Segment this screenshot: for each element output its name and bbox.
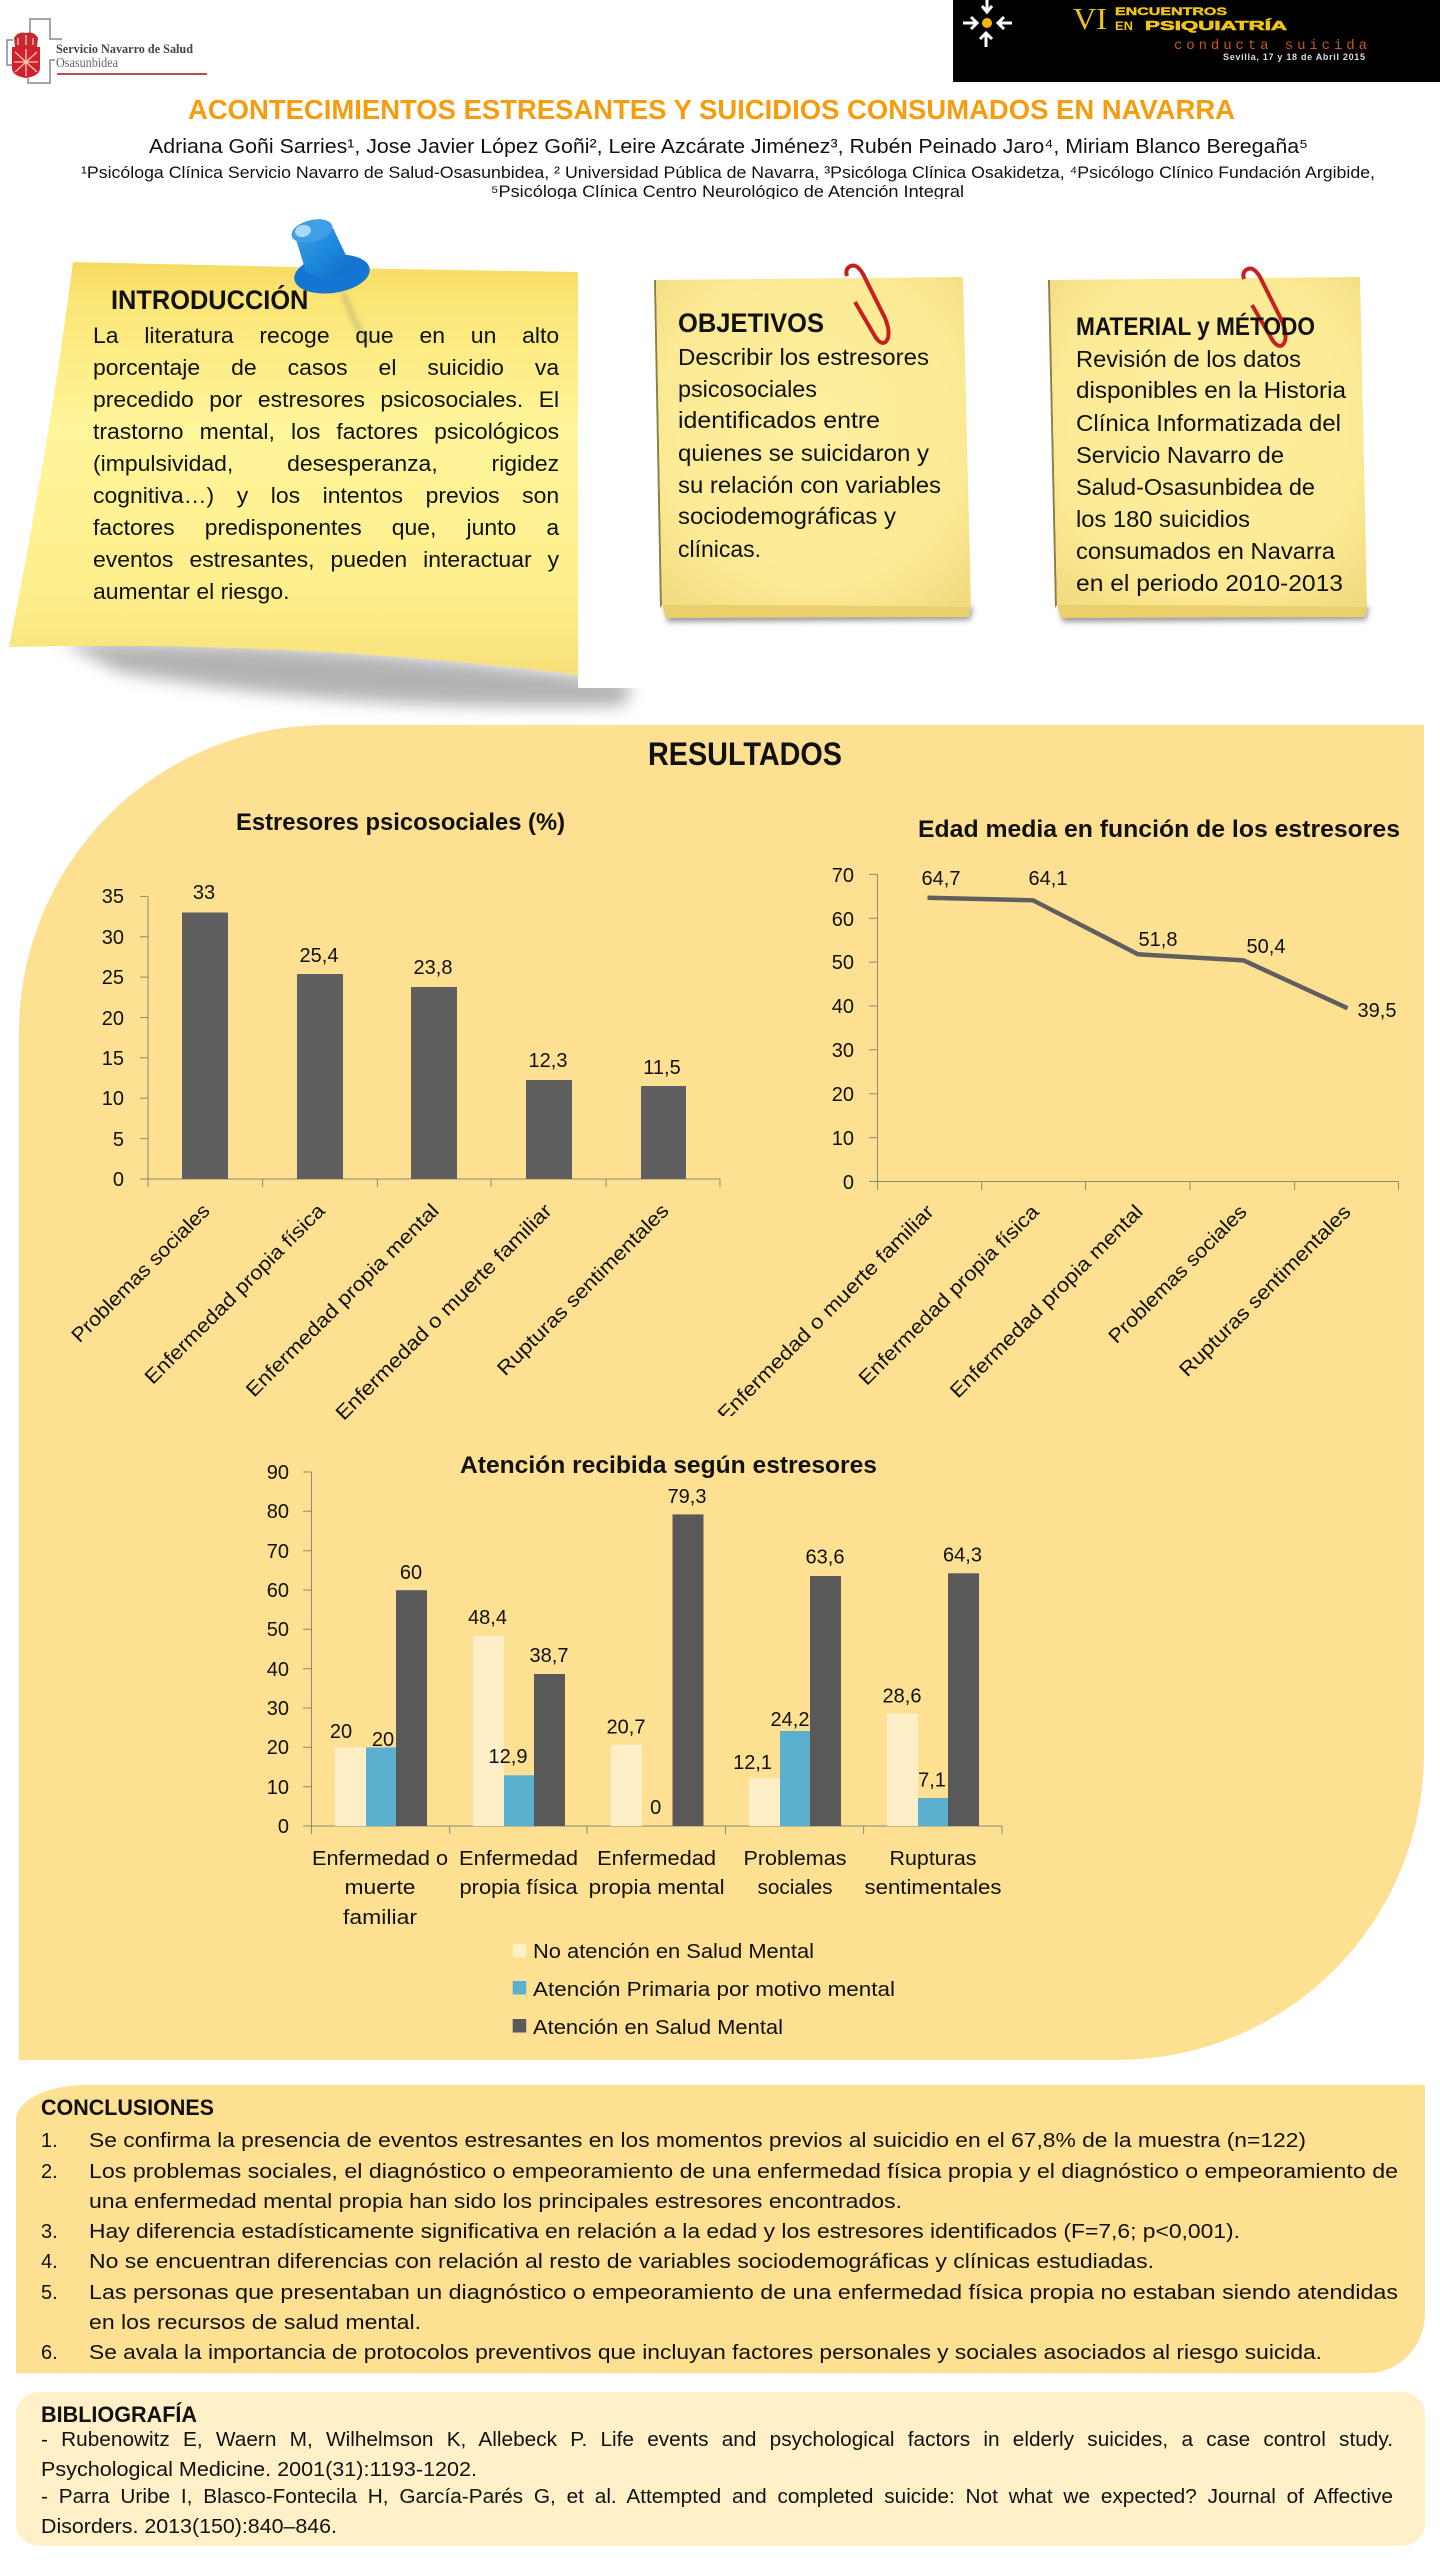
grouped bar chart: atención recibida: Atención recibida según estresores	[460, 1452, 877, 1479]
grouped bar chart: atención recibida: 38,7	[530, 1645, 568, 1667]
panel: conclusiones: Hay diferencia estadísticamente significativa en relación a la edad y los estresores identificados (F=7,6; p<0,001).	[89, 2221, 1240, 2243]
grouped bar chart: atención recibida: 20	[372, 1729, 394, 1751]
material y método heading and text: Clínica Informatizada del	[1076, 410, 1341, 436]
panel: conclusiones: 5.	[41, 2282, 58, 2304]
line chart: edad media: 20	[832, 1084, 854, 1106]
panel: objetivos sticky note	[654, 266, 973, 622]
bar chart: estresores psicosociales: 11,5	[643, 1057, 681, 1079]
objetivos heading and text: quienes se suicidaron y	[678, 440, 930, 466]
heading: resultados: RESULTADOS	[648, 736, 842, 772]
header banner: VI Encuentros en Psiquiatría: conducta suicida	[1174, 38, 1367, 54]
grouped bar chart: atención recibida: 0	[278, 1816, 289, 1838]
affiliations	[82, 166, 1374, 199]
header banner: VI Encuentros en Psiquiatría: Sevilla, 17 y 18 de Abril 2015	[1223, 52, 1365, 62]
line chart: edad media: 0	[843, 1172, 854, 1194]
line chart: edad media: Problemas sociales	[1104, 1201, 1252, 1348]
line chart: edad media: 40	[832, 996, 854, 1018]
objetivos heading and text: sociodemográficas y	[678, 503, 897, 529]
bar chart: estresores psicosociales: 25	[102, 967, 124, 989]
bar chart: estresores psicosociales: 15	[102, 1048, 124, 1070]
bar chart: estresores psicosociales: 12,3	[529, 1050, 567, 1072]
line chart: edad media: 64,1	[1029, 868, 1067, 890]
panel: material y método sticky note	[1048, 269, 1369, 622]
grouped bar chart: atención recibida: Rupturas	[890, 1848, 976, 1870]
bar chart: estresores psicosociales: Enfermedad propia mental	[242, 1200, 444, 1402]
pin shadow	[343, 293, 367, 343]
line chart: edad media: Enfermedad propia física	[855, 1200, 1044, 1390]
panel: introducción sticky note	[9, 215, 708, 707]
bar chart: estresores psicosociales: 20	[102, 1008, 124, 1030]
grouped bar chart: atención recibida: 20	[267, 1737, 289, 1759]
panel: bibliografía: Disorders. 2013(150):840–846.	[41, 2516, 337, 2538]
legend	[513, 1941, 895, 2039]
line chart: edad media: Rupturas sentimentales	[1175, 1201, 1356, 1381]
line chart: edad media: Edad media en función de los estresores	[918, 816, 1400, 843]
grouped bar chart: atención recibida: 40	[267, 1659, 289, 1681]
introducción paragraph: cognitiva…) y los intentos previos son	[93, 482, 559, 508]
line chart: edad media: 10	[832, 1128, 854, 1150]
objetivos heading and text: clínicas.	[678, 536, 761, 562]
bibliografía justified references: - Rubenowitz E, Waern M, Wilhelmson K, Allebeck P. Life events and psychological factors in elderly suicides, a case control study.	[41, 2429, 1393, 2451]
grouped bar chart: atención recibida: 10	[267, 1777, 289, 1799]
introducción paragraph: precedido por estresores psicosociales. El	[93, 386, 559, 412]
introducción paragraph: (impulsividad, desesperanza, rigidez	[93, 450, 559, 476]
bar chart: estresores psicosociales: 5	[113, 1129, 124, 1151]
grouped bar chart: atención recibida: Enfermedad	[459, 1848, 578, 1870]
grouped bar chart: atención recibida: 30	[267, 1698, 289, 1720]
grouped bar chart: atención recibida: 7,1	[918, 1770, 946, 1792]
objetivos heading and text	[678, 308, 941, 562]
panel: bibliografía: BIBLIOGRAFÍA	[41, 2402, 197, 2427]
header banner: VI Encuentros en Psiquiatría: VI	[1073, 1, 1107, 36]
panel: bibliografía	[16, 2392, 1425, 2546]
panel: conclusiones: Se confirma la presencia de eventos estresantes en los momentos previos al suicidio en el 67,8% de la muestra (n=122)	[89, 2130, 1306, 2152]
icon: red paperclip	[1243, 269, 1286, 346]
header banner: VI Encuentros en Psiquiatría: PSIQUIATRÍA	[1145, 18, 1288, 33]
panel: conclusiones: Se avala la importancia de protocolos preventivos que incluyan factores personales y sociales asociados al riesgo suicida.	[89, 2342, 1322, 2364]
material y método heading and text: MATERIAL y MÉTODO	[1076, 312, 1315, 341]
grouped bar chart: atención recibida: familiar	[343, 1907, 417, 1929]
line chart: edad media: 50	[832, 952, 854, 974]
bar chart: estresores psicosociales: Problemas sociales	[67, 1200, 215, 1347]
grouped bar chart: atención recibida: 80	[267, 1501, 289, 1523]
objetivos heading and text: psicosociales	[678, 376, 817, 402]
material y método heading and text: consumados en Navarra	[1076, 538, 1335, 564]
introducción paragraph: La literatura recoge que en un alto	[93, 322, 559, 348]
grouped bar chart: atención recibida: muerte	[344, 1877, 416, 1899]
panel: conclusiones: 2.	[41, 2161, 58, 2183]
affiliations: ⁵Psicóloga Clínica Centro Neurológico de Atención Integral	[491, 182, 964, 201]
objetivos heading and text: su relación con variables	[678, 472, 941, 498]
line chart: edad media: 50,4	[1247, 936, 1285, 958]
grouped bar chart: atención recibida: 12,9	[489, 1746, 527, 1768]
grouped bar chart: atención recibida: sociales	[758, 1877, 832, 1899]
introducción paragraph: trastorno mental, los factores psicológicos	[93, 418, 559, 444]
grouped bar chart: atención recibida: Problemas	[744, 1848, 846, 1870]
grouped bar chart: atención recibida: 20	[330, 1721, 352, 1743]
affiliations: ¹Psicóloga Clínica Servicio Navarro de Salud-Osasunbidea, ² Universidad Pública de Navarra, ³Psicóloga Clínica Osakidetza, ⁴Psicólogo Clínico Fundación Argibide,	[81, 163, 1375, 182]
grouped bar chart: atención recibida	[267, 1452, 1002, 2039]
panel: conclusiones: No se encuentran diferencias con relación al resto de variables sociodemográficas y clínicas estudiadas.	[89, 2251, 1154, 2273]
panel: conclusiones: 3.	[41, 2221, 58, 2243]
material y método heading and text: Servicio Navarro de	[1076, 442, 1284, 468]
introducción paragraph: porcentaje de casos el suicidio va	[93, 354, 559, 380]
material y método heading and text	[1076, 312, 1346, 596]
panel: conclusiones	[16, 2085, 1425, 2373]
icon: red paperclip	[846, 266, 889, 343]
panel: resultados	[19, 725, 1424, 2060]
line chart: edad media: 30	[832, 1040, 854, 1062]
panel: conclusiones: una enfermedad mental propia han sido los principales estresores encontrados.	[89, 2191, 902, 2213]
introducción paragraph	[93, 322, 560, 604]
line chart: edad media	[714, 816, 1400, 1426]
line chart: edad media: Enfermedad o muerte familiar	[714, 1201, 939, 1426]
grouped bar chart: atención recibida: 64,3	[943, 1545, 982, 1567]
grouped bar chart: atención recibida: 70	[267, 1541, 289, 1563]
grouped bar chart: atención recibida: 48,4	[468, 1607, 507, 1629]
bar chart: estresores psicosociales: 10	[102, 1088, 124, 1110]
authors: Adriana Goñi Sarries¹, Jose Javier López Goñi², Leire Azcárate Jiménez³, Rubén Peinado Jaro⁴, Miriam Blanco Beregaña⁵	[149, 136, 1308, 158]
line chart: edad media: 51,8	[1139, 929, 1177, 951]
header banner: VI Encuentros en Psiquiatría	[953, 0, 1440, 82]
objetivos heading and text: OBJETIVOS	[678, 308, 824, 338]
grouped bar chart: atención recibida: Enfermedad o	[312, 1848, 448, 1870]
grouped bar chart: atención recibida: 60	[267, 1580, 289, 1602]
header logo: Servicio Navarro de Salud: Servicio Navarro de Salud	[56, 41, 194, 56]
grouped bar chart: atención recibida: 90	[267, 1462, 289, 1484]
line chart: edad media: 70	[832, 865, 854, 887]
grouped bar chart: atención recibida: 28,6	[883, 1685, 921, 1707]
panel: conclusiones: CONCLUSIONES	[41, 2095, 214, 2120]
objetivos heading and text: Describir los estresores	[678, 344, 929, 370]
bar chart: estresores psicosociales: 0	[113, 1169, 124, 1191]
introducción heading: INTRODUCCIÓN	[111, 285, 308, 315]
icon: blue push pin	[289, 215, 372, 298]
grouped bar chart: atención recibida: 12,1	[733, 1752, 772, 1774]
bar chart: estresores psicosociales: 33	[193, 882, 215, 904]
grouped bar chart: atención recibida: 79,3	[668, 1486, 706, 1508]
material y método heading and text: los 180 suicidios	[1076, 506, 1250, 532]
panel: conclusiones: Las personas que presentaban un diagnóstico o empeoramiento de una enfermedad física propia no estaban siendo atendidas	[89, 2282, 1398, 2304]
grouped bar chart: atención recibida: 20,7	[607, 1716, 645, 1738]
grouped bar chart: atención recibida: propia mental	[589, 1877, 725, 1899]
bibliografía justified references: - Parra Uribe I, Blasco-Fontecila H, García-Parés G, et al. Attempted and completed suicide: Not what we expected? Journal of Affective	[41, 2486, 1393, 2508]
objetivos heading and text: identificados entre	[678, 407, 880, 433]
grouped bar chart: atención recibida: 24,2	[771, 1709, 809, 1731]
panel: bibliografía: Psychological Medicine. 2001(31):1193-1202.	[41, 2459, 477, 2481]
header banner: VI Encuentros en Psiquiatría: ENCUENTROS	[1115, 6, 1227, 18]
grouped bar chart: atención recibida: 63,6	[806, 1547, 844, 1569]
bar chart: estresores psicosociales: Enfermedad propia física	[141, 1199, 330, 1389]
line chart: edad media: 39,5	[1358, 1000, 1396, 1022]
panel: conclusiones: 4.	[41, 2251, 58, 2273]
grouped bar chart: atención recibida: 50	[267, 1619, 289, 1641]
panel: conclusiones: 6.	[41, 2342, 58, 2364]
icon: converging arrows	[963, 0, 1012, 47]
introducción paragraph: eventos estresantes, pueden interactuar y	[93, 546, 559, 572]
material y método heading and text: disponibles en la Historia	[1076, 377, 1346, 403]
bar chart: estresores psicosociales: 23,8	[414, 957, 452, 979]
bar chart: estresores psicosociales: 30	[102, 927, 124, 949]
header logo: Servicio Navarro de Salud	[7, 19, 207, 83]
legend: Atención en Salud Mental	[533, 2017, 783, 2039]
introducción paragraph: factores predisponentes que, junto a	[93, 514, 559, 540]
material y método heading and text: en el periodo 2010-2013	[1076, 570, 1343, 596]
bar chart: estresores psicosociales: 35	[102, 886, 124, 908]
bibliografía justified references	[41, 2429, 1393, 2508]
header logo: Servicio Navarro de Salud: Osasunbidea	[56, 56, 119, 71]
grouped bar chart: atención recibida: 60	[400, 1562, 422, 1584]
legend: No atención en Salud Mental	[533, 1941, 814, 1963]
line chart: edad media: 60	[832, 909, 854, 931]
grouped bar chart: atención recibida: propia física	[460, 1877, 578, 1899]
grouped bar chart: atención recibida: sentimentales	[864, 1877, 1002, 1899]
header banner: VI Encuentros en Psiquiatría: EN	[1115, 19, 1133, 33]
grouped bar chart: atención recibida: 0	[650, 1797, 661, 1819]
material y método heading and text: Salud-Osasunbidea de	[1076, 474, 1315, 500]
bar chart: estresores psicosociales: Rupturas sentimentales	[493, 1200, 674, 1380]
legend: Atención Primaria por motivo mental	[533, 1979, 895, 2001]
title: ACONTECIMIENTOS ESTRESANTES Y SUICIDIOS CONSUMADOS EN NAVARRA	[188, 94, 1235, 125]
line chart: edad media: Enfermedad propia mental	[946, 1201, 1148, 1403]
panel: conclusiones: 1.	[41, 2130, 58, 2152]
grouped bar chart: atención recibida: Enfermedad	[597, 1848, 716, 1870]
bar chart: estresores psicosociales: 25,4	[300, 945, 338, 967]
introducción paragraph: aumentar el riesgo.	[93, 578, 289, 604]
line chart: edad media: 64,7	[922, 868, 960, 890]
panel: conclusiones: Los problemas sociales, el diagnóstico o empeoramiento de una enfermedad física propia y el diagnóstico o empeoramiento de	[89, 2161, 1398, 2183]
panel: conclusiones: en los recursos de salud mental.	[89, 2312, 421, 2334]
bar chart: estresores psicosociales: Enfermedad o muerte familiar	[332, 1200, 557, 1425]
bar chart: estresores psicosociales: Estresores psicosociales (%)	[236, 809, 565, 836]
bar chart: estresores psicosociales	[67, 809, 720, 1425]
material y método heading and text: Revisión de los datos	[1076, 346, 1301, 372]
